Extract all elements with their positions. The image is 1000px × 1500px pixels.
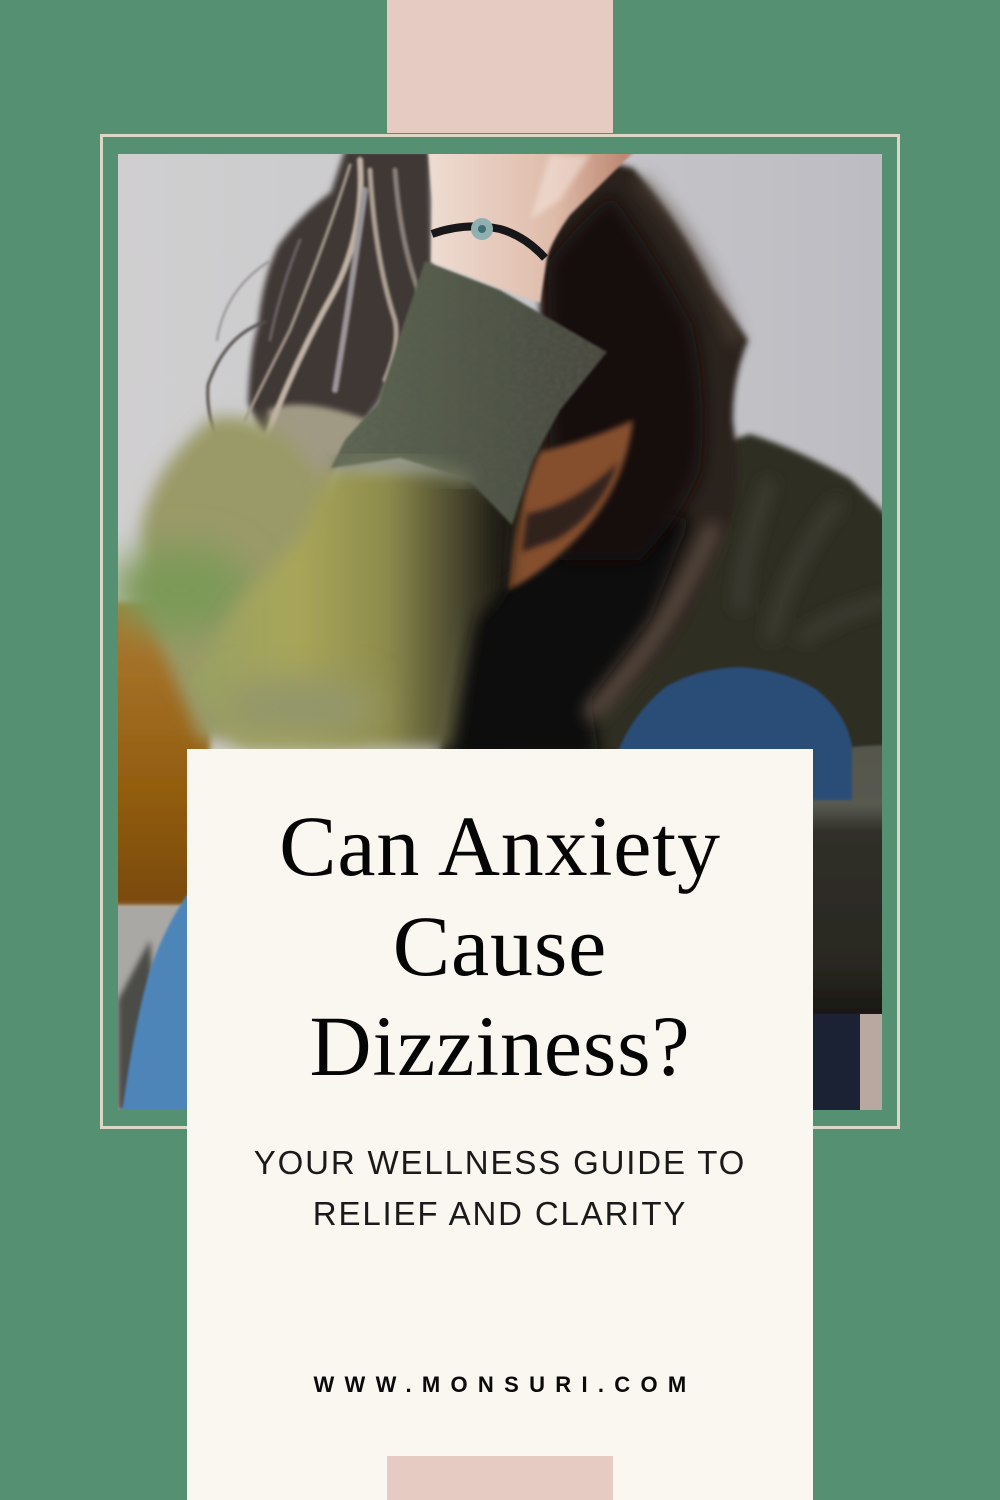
hair left mass (248, 150, 432, 470)
sweater highlights (740, 480, 890, 640)
closed eye shadow (522, 462, 618, 552)
knuckle shading (530, 155, 590, 220)
dark body sweater right (440, 434, 890, 770)
photo: woman holding her head (118, 154, 882, 1110)
wall background (118, 154, 882, 1110)
sleeve lower pale (220, 676, 380, 740)
hair dark core right (548, 195, 703, 560)
top pink accent block (387, 0, 613, 133)
subtitle (254, 1144, 746, 1232)
title (279, 798, 721, 1094)
hair lighter strands right (592, 180, 735, 712)
black shadow centre (440, 500, 690, 760)
left shoulder blurred (141, 416, 360, 740)
blurred furniture: orange cabinet, grey shelf (100, 602, 210, 1116)
hair left lower fade (268, 404, 368, 500)
plant green blur (110, 545, 250, 635)
hair right mass (460, 160, 748, 760)
wrist and hand (428, 150, 636, 303)
cuff upper knit (331, 261, 607, 525)
bracelet band (432, 226, 545, 258)
jeans left (122, 888, 200, 1112)
cream text panel (187, 749, 813, 1500)
lower right sleeve (790, 745, 890, 1016)
subtitle: RELIEF AND CLARITY (313, 1195, 687, 1232)
cuff light fringe (335, 460, 470, 482)
subtitle: YOUR WELLNESS GUIDE TO (254, 1144, 746, 1181)
knee jeans (615, 667, 852, 800)
title: Dizziness? (309, 998, 690, 1094)
website url: WWW.MONSURI.COM (313, 1372, 697, 1397)
title: Cause (393, 898, 607, 994)
bracelet charm (471, 218, 493, 240)
flyaway hair loops (208, 262, 268, 500)
bottom pink accent block (387, 1456, 613, 1500)
title: Can Anxiety (279, 798, 721, 894)
arm sleeve olive gradient (190, 468, 515, 748)
face (508, 420, 633, 590)
hair left highlight strands (245, 160, 418, 450)
thin cream photo frame (100, 134, 900, 1129)
